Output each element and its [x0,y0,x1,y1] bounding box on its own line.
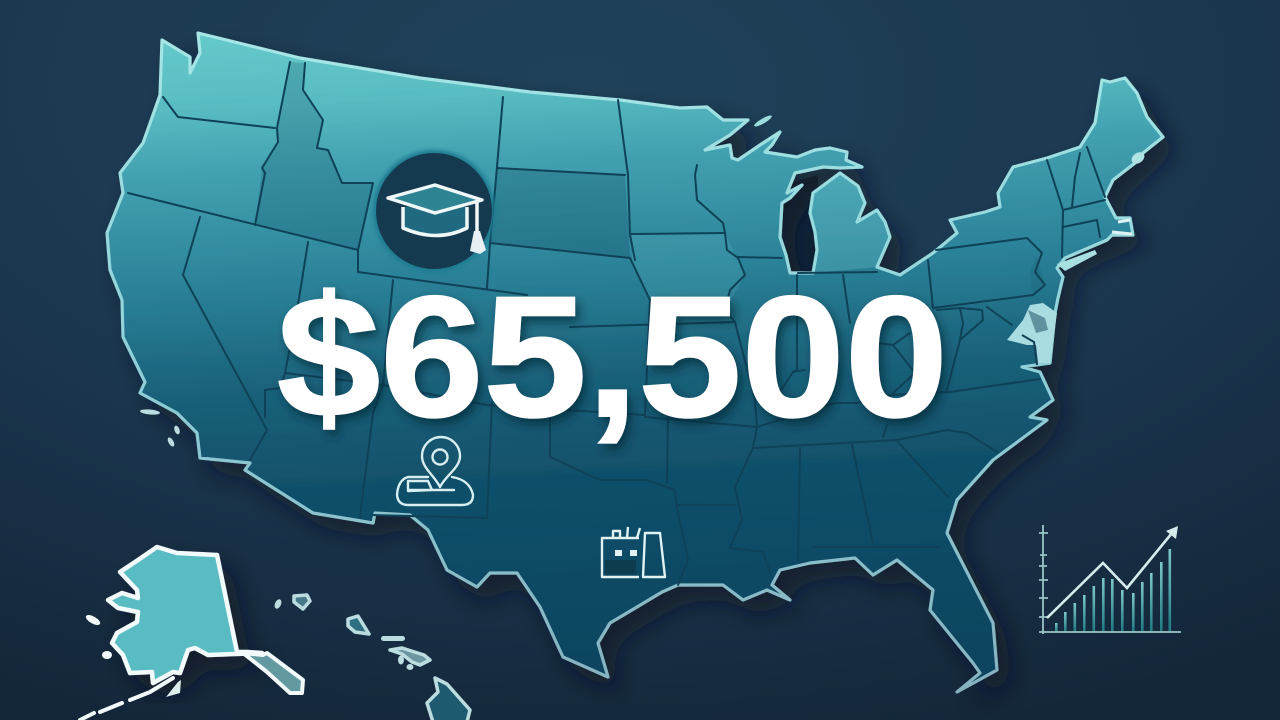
icon: graduation cap badge [373,150,495,272]
icon: factory [602,527,665,577]
state borders [128,62,1105,585]
Cape Cod [1112,220,1132,234]
Alaska mainland [108,547,262,683]
icon: location pin on map base [397,437,473,505]
Kodiak [166,680,181,697]
value: salary figure: $65,500 [277,261,948,453]
small islands [84,613,102,627]
Kahoolawe [406,664,414,670]
Lanai [398,656,404,664]
map: contiguous United States [107,33,1163,692]
Hawaii [273,595,470,720]
bars [1055,549,1171,632]
California channel islands [140,409,181,448]
Lake Michigan water [783,175,820,276]
Molokai [381,636,405,641]
axes [1039,525,1181,634]
Aleutian islands [80,678,173,720]
Long Island [1057,250,1097,271]
trend line [1047,533,1172,618]
chart: rising trend [1039,525,1181,634]
Alaska [80,547,303,720]
Oahu [348,616,369,634]
Isle Royale [753,114,773,128]
Niihau [273,598,283,610]
state tints [255,62,1045,325]
Alaska panhandle [243,653,303,693]
land outline [107,33,1163,692]
Maui [390,648,430,665]
Penobscot blob [1129,150,1147,166]
Chesapeake Bay [1007,303,1057,365]
Big Island [427,678,470,720]
arrow head [1166,526,1178,539]
Kauai [294,595,310,609]
